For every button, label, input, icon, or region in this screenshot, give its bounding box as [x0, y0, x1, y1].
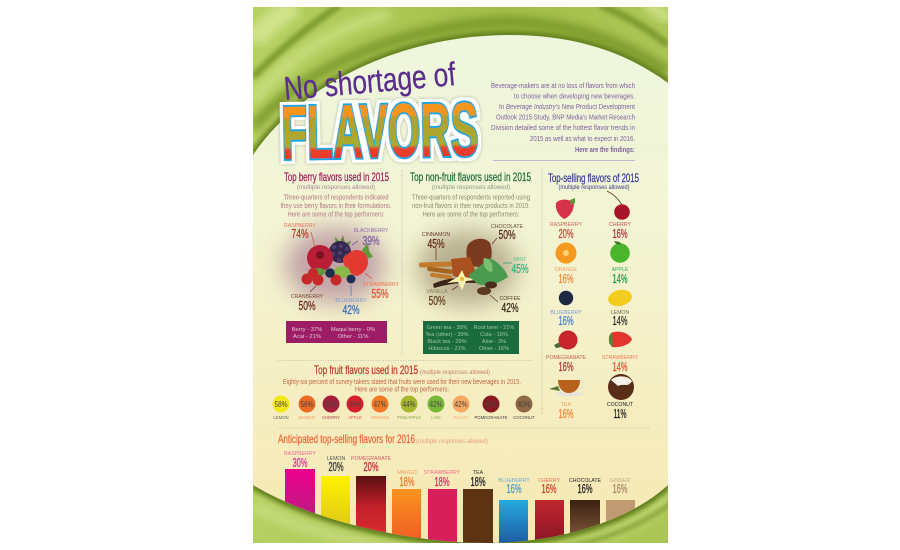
item: tea: [558, 402, 574, 421]
fruit item: lime: [428, 396, 444, 420]
panel: top non-fruit flavors: [410, 170, 531, 354]
item: tea: TEA: [561, 402, 572, 408]
label: blueberry: [335, 298, 367, 317]
bar label: mango: MANGO: [397, 470, 417, 476]
fruit item: lime: LIME: [431, 415, 441, 420]
box: other berry flavors: Maqui berry - 0%: [331, 327, 375, 333]
intro text: 2015 as well as what to expect in 2016.: [530, 136, 635, 143]
bar label: pomegranate: POMEGRANATE: [351, 456, 392, 462]
fruit item: apple: 49%: [348, 400, 362, 409]
panel: top-selling flavors: [546, 171, 639, 421]
box: other non-fruit flavors: Aloe - 3%: [482, 339, 506, 345]
box: other berry flavors: Acai - 21%: [293, 334, 321, 340]
label: mint: MINT: [514, 257, 527, 263]
bar label: lemon: 20%: [328, 460, 344, 474]
label: vanilla: VANILLA: [427, 289, 448, 295]
label: mint: [512, 257, 528, 276]
bar label: ginger: 16%: [612, 482, 628, 496]
text: berry description: Three-quarters of respondents indicated: [284, 194, 389, 202]
text: fruit description: [283, 379, 521, 394]
text: fruit description: Eighty-six percent of survey-takers stated that fruits were used for their new beverages in 2015.: [283, 379, 521, 386]
item: strawberry: 14%: [612, 360, 628, 374]
note: berry responses: (multiple responses allowed): [297, 184, 375, 191]
text: berry description: they use berry flavors in their formulations.: [280, 203, 392, 210]
label: strawberry: STRAWBERRY: [363, 282, 400, 288]
icon: strawberry: [609, 332, 632, 347]
heading: berry: Top berry flavors used in 2015: [284, 170, 389, 184]
fruit item: cherry: 53%: [324, 400, 338, 409]
fruit item: peach: 42%: [454, 400, 468, 409]
bar label: strawberry: 18%: [434, 475, 450, 489]
bar label: strawberry: STRAWBERRY: [424, 470, 461, 476]
item: tea: 16%: [558, 407, 574, 421]
icon: blueberry: [559, 291, 573, 305]
label: blueberry: BLUEBERRY: [335, 298, 367, 304]
bar label: mango: [397, 470, 417, 489]
heading: top-selling: Top-selling flavors of 2015: [548, 171, 639, 185]
bar label: raspberry: RASPBERRY: [284, 451, 316, 457]
intro text: to choose when developing new beverages.: [514, 94, 635, 100]
text: berry description: Here are some of the top performers:: [288, 212, 385, 218]
bar label: pomegranate: 20%: [364, 460, 378, 474]
fruit item: cherry: [322, 396, 340, 420]
note: non-fruit responses: (multiple responses allowed): [432, 184, 510, 191]
label: strawberry: 55%: [372, 287, 388, 301]
box: other non-fruit flavors: Hibiscus - 21%: [428, 346, 466, 352]
fruit item: cherry: CHERRY: [322, 415, 340, 420]
fruit item: orange: [371, 396, 389, 420]
label: coffee: 42%: [502, 301, 518, 315]
intro text: Outlook 2015 Study, BNP Media’s Market Research: [496, 114, 635, 122]
label: raspberry: [284, 223, 316, 241]
fruit item: coconut: [513, 396, 535, 420]
item: pomegranate: [546, 355, 587, 374]
heading: No shortage of: No shortage of: [282, 55, 458, 107]
label: cinnamon: [422, 232, 450, 251]
intro text: Here are the findings:: [575, 147, 635, 154]
item: coconut: [607, 402, 634, 421]
icon: pomegranate: [554, 330, 578, 350]
label: vanilla: 50%: [428, 294, 446, 308]
fruit item: lime: 42%: [430, 400, 442, 409]
box: other non-fruit flavors: Tea (other) - 39%: [425, 332, 469, 338]
label: cinnamon: CINNAMON: [422, 232, 450, 238]
box: other berry flavors: Berry - 37%: [292, 327, 322, 333]
text: fruit description: Here are some of the top performers:: [355, 386, 449, 394]
note: anticipated responses: (multiple responses allowed): [416, 439, 488, 445]
item: orange: ORANGE: [555, 267, 578, 273]
label: blackberry: [354, 228, 389, 248]
bar label: tea: TEA: [473, 470, 484, 476]
illustration: chocolate, cinnamon, vanilla, mint, coffee: [417, 230, 517, 306]
fruit item: apple: [346, 396, 364, 420]
illustration: mixed berries: [285, 227, 385, 303]
fruit item: pomegranate: POMEGRANATE: [474, 415, 508, 420]
item: raspberry: RASPBERRY: [550, 222, 582, 228]
label: cinnamon: 45%: [428, 237, 444, 251]
box: other non-fruit flavors: [423, 321, 519, 354]
label: mint: 45%: [512, 262, 528, 276]
item: blueberry: 16%: [558, 314, 574, 328]
label: strawberry: [363, 282, 400, 301]
box: other berry flavors: [286, 321, 387, 343]
panel: top fruit flavors: [272, 363, 535, 420]
bar label: raspberry: [284, 451, 316, 470]
box: other non-fruit flavors: Cola - 16%: [480, 332, 508, 338]
label: blackberry: BLACKBERRY: [354, 228, 389, 234]
bar label: raspberry: 30%: [292, 456, 308, 470]
label: raspberry: RASPBERRY: [284, 223, 316, 229]
fruit item: mango: MANGO: [299, 415, 316, 420]
fruit item: apple: APPLE: [348, 415, 362, 420]
item: pomegranate: POMEGRANATE: [546, 355, 587, 361]
item: cherry: [609, 222, 631, 241]
item: orange: [555, 267, 578, 286]
bar label: pomegranate: [351, 456, 392, 474]
heading: anticipated: Anticipated top-selling flavors for 2016: [278, 432, 415, 446]
box: other non-fruit flavors: Root beer - 21%: [474, 325, 514, 331]
item: strawberry: STRAWBERRY: [602, 355, 639, 361]
label: coffee: [499, 296, 521, 315]
fruit item: coconut: COCONUT: [513, 415, 535, 420]
item: raspberry: [550, 222, 582, 241]
fruit item: orange: 47%: [374, 400, 386, 409]
bar label: cherry: [538, 478, 560, 496]
item: coconut: 11%: [614, 407, 626, 421]
item: apple: 14%: [612, 272, 628, 286]
item: apple: [612, 267, 629, 286]
item: pomegranate: 16%: [558, 360, 574, 374]
fruit item: orange: ORANGE: [371, 415, 389, 420]
item: coconut: COCONUT: [607, 402, 634, 408]
icon: tea: [549, 380, 584, 396]
text: non-fruit description: [412, 194, 530, 218]
panel: anticipated flavors 2016: [278, 432, 635, 544]
bar label: tea: [470, 470, 486, 489]
fruit item: pineapple: 44%: [402, 400, 416, 409]
icon: apple: [610, 241, 630, 263]
item: orange: 16%: [558, 272, 574, 286]
label: cranberry: 50%: [298, 299, 316, 313]
bar label: mango: 18%: [400, 475, 414, 489]
item: cherry: 16%: [612, 227, 628, 241]
intro text: Beverage-makers are at no loss of flavors from which: [491, 83, 635, 90]
label: blueberry: 42%: [342, 303, 360, 317]
box: other non-fruit flavors: Black tea - 29%: [427, 339, 467, 345]
box: other non-fruit flavors: Other - 16%: [479, 346, 509, 352]
fruit item: coconut: 40%: [518, 400, 530, 409]
fruit item: peach: [452, 396, 470, 420]
icon: orange: [556, 242, 576, 264]
panel: top berry flavors: [280, 170, 400, 343]
heading: fruit: Top fruit flavors used in 2015: [314, 363, 418, 377]
item: blueberry: [550, 310, 582, 328]
item: lemon: [611, 310, 629, 328]
note: top-selling responses: (multiple responses allowed): [558, 184, 630, 191]
bar label: chocolate: CHOCOLATE: [569, 478, 601, 484]
box: other berry flavors: Other - 11%: [338, 334, 368, 340]
bar label: tea: 18%: [470, 475, 486, 489]
item: strawberry: [602, 355, 639, 374]
intro text: Division detailed some of the hottest flavor trends in: [491, 125, 635, 132]
label: chocolate: [491, 224, 523, 242]
label: blackberry: 39%: [362, 234, 380, 248]
fruit item: pineapple: [397, 396, 421, 420]
fruit item: lemon: [272, 396, 290, 420]
fruit item: mango: [298, 396, 316, 420]
text: non-fruit description: Three-quarters of respondents reported using: [412, 194, 530, 202]
box: other non-fruit flavors: Green tea - 39%: [426, 325, 468, 331]
heading: Flavors: FLAVORS: [281, 88, 479, 176]
bar label: ginger: [610, 478, 630, 496]
bar label: lemon: LEMON: [327, 456, 345, 462]
bar label: cherry: CHERRY: [538, 478, 560, 484]
label: raspberry: 74%: [292, 227, 308, 241]
icon: coconut: [608, 374, 634, 400]
bar label: blueberry: 16%: [506, 482, 522, 496]
fruit item: pomegranate: [474, 396, 508, 420]
label: vanilla: [427, 289, 448, 308]
icon: raspberry: [556, 198, 575, 219]
fruit item: mango: 56%: [300, 400, 314, 409]
item: lemon: LEMON: [611, 310, 629, 316]
bar chart: [284, 451, 635, 544]
fruit item: pomegranate: 42%: [484, 400, 498, 409]
label: coffee: COFFEE: [499, 296, 521, 302]
note: fruit responses: (multiple responses allowed): [420, 370, 490, 376]
label: chocolate: 50%: [498, 228, 516, 242]
heading: non-fruit: Top non-fruit flavors used in 2015: [410, 170, 531, 184]
item: cherry: CHERRY: [609, 222, 631, 228]
label: chocolate: CHOCOLATE: [491, 224, 523, 230]
item: lemon: 14%: [612, 314, 628, 328]
icon: lemon: [607, 288, 633, 308]
label: cranberry: [291, 294, 324, 313]
item: raspberry: 20%: [558, 227, 574, 241]
bar label: blueberry: [498, 478, 530, 496]
item: apple: APPLE: [612, 267, 629, 273]
bar label: lemon: [327, 456, 345, 474]
fruit item: lemon: LEMON: [273, 415, 289, 420]
icon: cherry: [607, 191, 630, 220]
bar label: cherry: 16%: [542, 482, 556, 496]
label: cranberry: CRANBERRY: [291, 294, 324, 300]
fruit item: peach: PEACH: [454, 415, 468, 420]
intro text: In Beverage Industry’s New Product Development: [499, 104, 635, 111]
item: blueberry: BLUEBERRY: [550, 310, 582, 316]
fruit item: pineapple: PINEAPPLE: [397, 415, 421, 420]
bar label: blueberry: BLUEBERRY: [498, 478, 530, 484]
text: berry description: [280, 194, 392, 218]
bar label: chocolate: [569, 478, 601, 496]
fruit item: lemon: 58%: [274, 400, 288, 409]
text: non-fruit description: Here are some of the top performers:: [422, 212, 520, 218]
bar label: chocolate: 16%: [578, 482, 592, 496]
intro text: [491, 83, 635, 154]
poster background: [253, 3, 672, 550]
bar label: ginger: GINGER: [610, 478, 630, 484]
bar label: strawberry: [424, 470, 461, 489]
text: non-fruit description: non-fruit flavors in their new products in 2015.: [412, 203, 530, 210]
